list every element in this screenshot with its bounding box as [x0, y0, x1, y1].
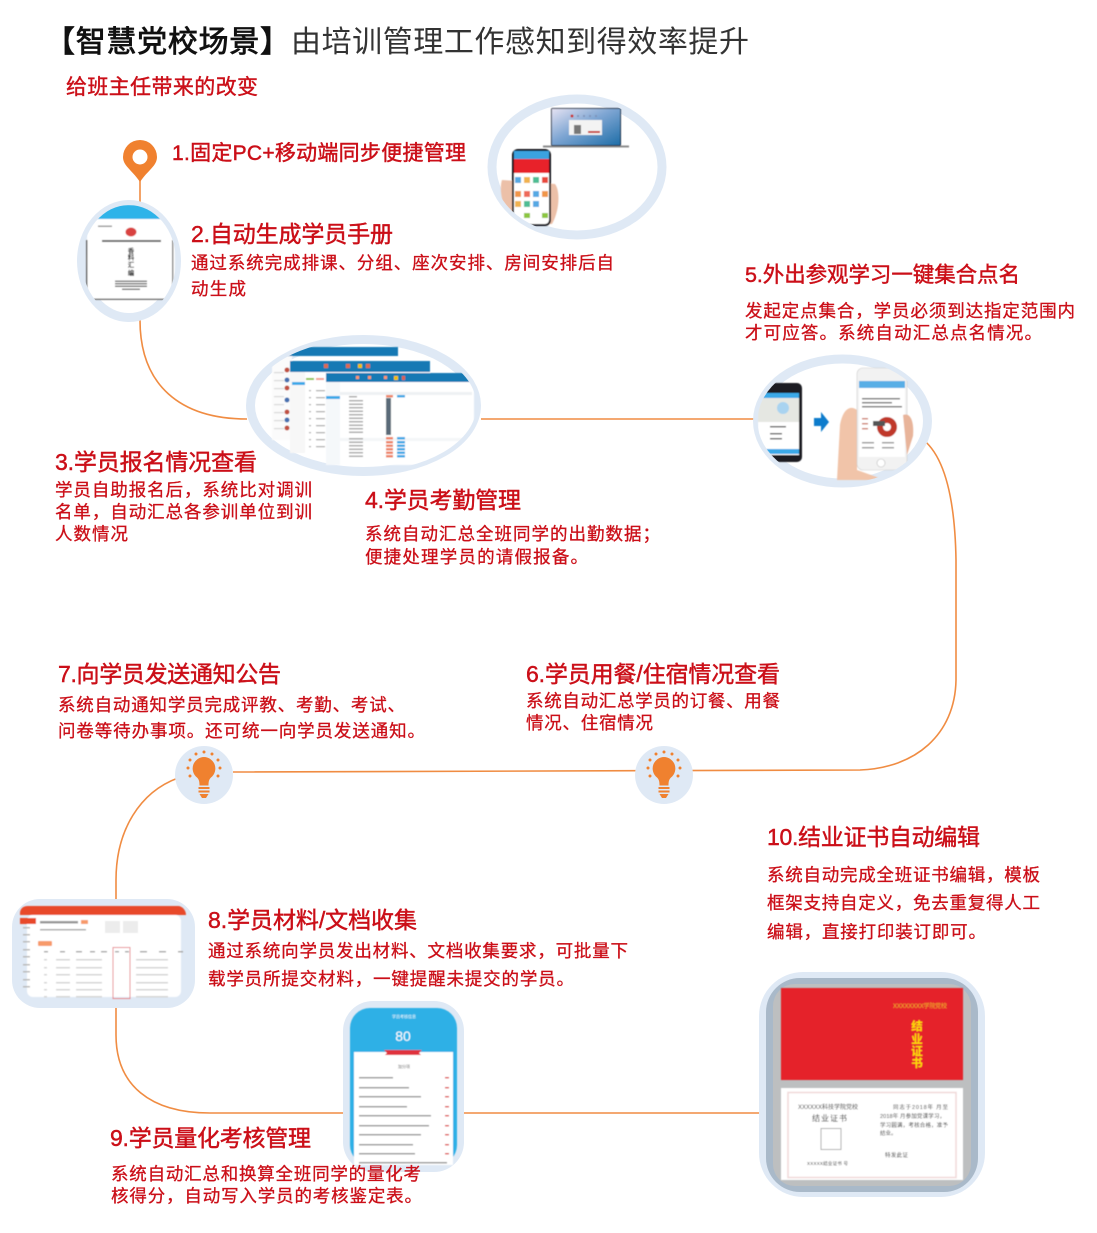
step 2 text — [191, 221, 614, 299]
icon: light bulb right — [635, 746, 693, 804]
step 2 thumbnail: handbook: 编 — [128, 268, 135, 277]
step 10 image: graduation certificate: XXXXXX科技学院党校 — [798, 1103, 858, 1111]
step 10 text: 系统自动完成全班证书编辑，模板 — [767, 865, 1040, 885]
step 3 text: 学员自助报名后，系统比对调训 — [55, 480, 312, 500]
step 10 image: graduation certificate: 结业。 — [880, 1129, 897, 1137]
step 10 image: graduation certificate: 2018年 月参加党课学习， — [880, 1112, 945, 1120]
step 10 image: graduation certificate: 学习圆满，考核合格，准予 — [880, 1121, 948, 1129]
step 9 text: 9.学员量化考核管理 — [110, 1125, 311, 1151]
step 3 text: 人数情况 — [55, 524, 128, 544]
step 10 image: graduation certificate: 同志于2018年 月至 — [893, 1103, 948, 1111]
step 3/4 image: management screens — [250, 340, 476, 472]
step 4 text — [365, 487, 660, 567]
icon: location pin — [123, 140, 157, 182]
step 10 text: 框架支持自定义，免去重复得人工 — [767, 893, 1040, 913]
step 9 image: assessment phone screen: 学员考核信息 — [392, 1013, 416, 1019]
step 6 text — [526, 661, 780, 733]
connector path — [116, 178, 956, 1113]
step 10 image: graduation certificate: 业 — [911, 1033, 923, 1046]
step 9 image: assessment phone screen: 80 — [395, 1028, 411, 1044]
step 2 text: 2.自动生成学员手册 — [191, 221, 393, 247]
step 2 thumbnail: handbook — [82, 204, 178, 318]
title — [45, 26, 749, 59]
step 2 thumbnail: handbook: 料 — [128, 252, 135, 262]
step 10 text: 编辑，直接打印装订即可。 — [767, 922, 986, 942]
step 8 text — [208, 907, 628, 989]
title: 【智慧党校场景】 — [45, 26, 290, 59]
step 2 text: 动生成 — [191, 279, 246, 299]
step 1 heading: 1.固定PC+移动端同步便捷管理 — [172, 142, 466, 165]
step 10 image: graduation certificate: 特发此证 — [885, 1151, 908, 1159]
step 10 image: graduation certificate: 结业证书 — [812, 1113, 847, 1123]
step 6 text: 系统自动汇总学员的订餐、用餐 — [526, 691, 780, 711]
step 3 text — [55, 449, 312, 544]
step 8 image: document table screenshot — [12, 899, 195, 1008]
step 9 text — [110, 1125, 422, 1206]
step 2 thumbnail: handbook: 香 — [128, 246, 135, 255]
step 7 text — [58, 661, 425, 741]
step 10 image: graduation certificate — [759, 972, 985, 1197]
step 9 image: assessment phone screen — [343, 1001, 464, 1172]
step 5 text: 才可应答。系统自动汇总点名情况。 — [745, 323, 1042, 343]
step 9 text: 系统自动汇总和换算全班同学的量化考 — [111, 1164, 421, 1184]
step 5 text — [745, 263, 1075, 343]
step 7 text: 问卷等待办事项。还可统一向学员发送通知。 — [58, 721, 425, 741]
step 5 image: phones with map and chart — [758, 359, 928, 483]
step 10 text: 10.结业证书自动编辑 — [767, 824, 980, 850]
subtitle: 给班主任带来的改变 — [66, 76, 258, 99]
step 10 image: graduation certificate: XXXXX结业证书 号 — [807, 1160, 848, 1167]
step 4 text: 系统自动汇总全班同学的出勤数据； — [365, 524, 660, 544]
step 6 text: 6.学员用餐/住宿情况查看 — [526, 661, 780, 687]
image: laptop and phone — [492, 99, 662, 235]
step 10 image: graduation certificate: 书 — [911, 1056, 923, 1070]
step 10 image: graduation certificate: 结 — [911, 1019, 923, 1033]
step 9 text: 核得分，自动写入学员的考核鉴定表。 — [111, 1186, 422, 1206]
step 9 image: assessment phone screen: 加分项 — [398, 1063, 410, 1069]
step 4 text: 4.学员考勤管理 — [365, 487, 521, 513]
step 5 text: 5.外出参观学习一键集合点名 — [745, 263, 1020, 287]
step 10 image: graduation certificate: XXXXXXXX学院党校 — [893, 1002, 947, 1010]
title: 由培训管理工作感知到得效率提升 — [291, 26, 749, 59]
step 2 text: 通过系统完成排课、分组、座次安排、房间安排后自 — [191, 253, 614, 273]
step 2 thumbnail: handbook: 汇 — [128, 261, 135, 269]
step 7 text: 系统自动通知学员完成评教、考勤、考试、 — [58, 695, 405, 715]
step 10 image: graduation certificate: 证 — [911, 1045, 923, 1058]
step 3 text: 名单，自动汇总各参训单位到训 — [55, 502, 312, 522]
icon: light bulb left — [175, 746, 233, 804]
step 3 text: 3.学员报名情况查看 — [55, 449, 257, 475]
step 8 text: 8.学员材料/文档收集 — [208, 907, 417, 933]
step 10 text — [767, 824, 1040, 942]
step 6 text: 情况、住宿情况 — [526, 713, 653, 733]
step 8 text: 载学员所提交材料，一键提醒未提交的学员。 — [208, 969, 574, 989]
step 4 text: 便捷处理学员的请假报备。 — [365, 547, 588, 567]
step 5 text: 发起定点集合，学员必须到达指定范围内 — [745, 301, 1075, 321]
step 7 text: 7.向学员发送通知公告 — [58, 661, 281, 687]
step 8 text: 通过系统向学员发出材料、文档收集要求，可批量下 — [208, 941, 628, 961]
